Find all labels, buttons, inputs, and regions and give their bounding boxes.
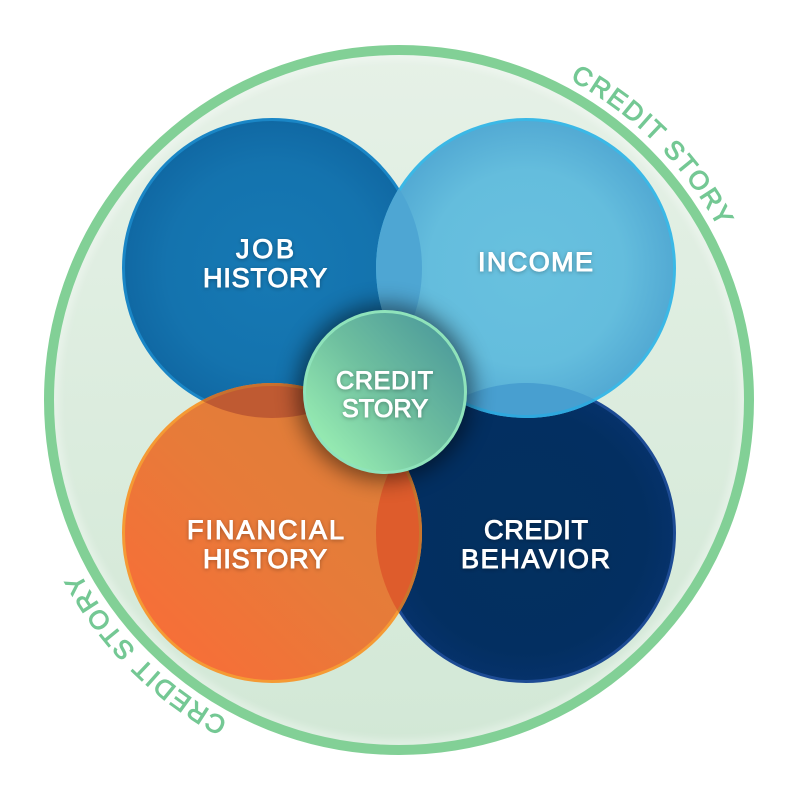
- label: center credit story: STORY: [342, 395, 428, 423]
- label: credit behavior: [461, 515, 610, 574]
- circular label: credit story bottom left: CREDIT STORY: [64, 578, 224, 734]
- circle: credit behavior: [378, 384, 674, 682]
- label: center credit story: CREDIT: [336, 367, 433, 395]
- overlap: job history and income: [376, 188, 422, 315]
- circle: income: [378, 120, 674, 416]
- circle: financial history: [124, 384, 420, 682]
- label: income: INCOME: [478, 247, 593, 277]
- label: center credit story: [336, 367, 433, 423]
- label: financial history: [187, 515, 344, 574]
- circle: job history: [124, 120, 420, 416]
- label: financial history: FINANCIAL: [187, 515, 344, 545]
- center circle shadow: [297, 304, 473, 480]
- center circle: credit story: [304, 312, 466, 472]
- label: job history: JOB: [236, 234, 294, 264]
- overlap: credit behavior and income: [466, 383, 596, 418]
- label: financial history: HISTORY: [203, 544, 327, 574]
- overlap: job history and financial history: [202, 383, 306, 418]
- label: credit behavior: CREDIT: [484, 515, 588, 545]
- label: job history: [203, 234, 327, 293]
- overlap: credit behavior and financial history: [376, 470, 422, 613]
- label: job history: HISTORY: [203, 263, 327, 293]
- label: credit behavior: BEHAVIOR: [461, 544, 610, 574]
- circular label: credit story top right: CREDIT STORY: [574, 66, 734, 222]
- outer ring: credit story: [49, 50, 749, 750]
